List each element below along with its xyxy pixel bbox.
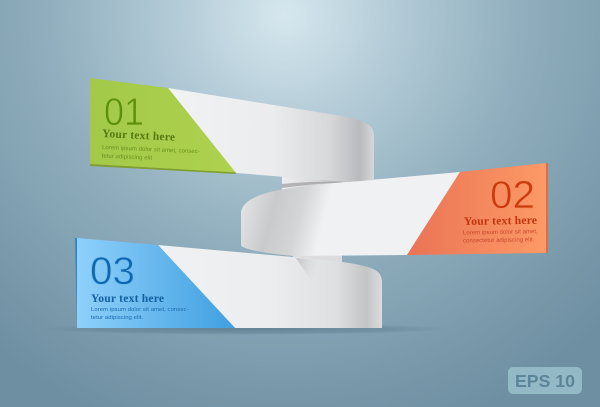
badge: EPS 10: [508, 367, 582, 394]
green tab: [90, 78, 236, 173]
number 02: 02: [490, 174, 535, 217]
ribbon 03 fold shadow: [296, 258, 320, 282]
orange tab: [407, 163, 547, 255]
body text 02: Lorem ipsum dolor sit amet,: [463, 229, 538, 236]
number 03: 03: [90, 250, 135, 293]
floor shadow: [40, 323, 450, 335]
badge: EPS 10: EPS 10: [515, 371, 575, 391]
body text 03: tetur adipiscing elit.: [91, 315, 143, 321]
heading 02: Your text here: [464, 214, 537, 228]
white ribbon 02: [241, 172, 460, 256]
blue tab: [77, 238, 235, 328]
panel: ribbon 02: [241, 163, 548, 256]
body text 01: tetur adipiscing elit: [102, 153, 153, 162]
white ribbon 03: [158, 245, 382, 328]
shadow under ribbon 01: [282, 182, 342, 188]
central column: [282, 172, 342, 266]
panel: ribbon 03: [75, 238, 382, 328]
blue tab side edge: [75, 238, 78, 328]
number 01: 01: [104, 91, 144, 134]
body text 01: Lorem ipsum dolor sit amet, consec-: [102, 145, 200, 155]
white ribbon 01: [168, 88, 374, 182]
green tab lower edge: [90, 164, 236, 174]
panel: ribbon 01: [90, 78, 374, 182]
body text 02: consectetur adipiscing elit.: [463, 237, 535, 244]
orange tab side edge: [546, 163, 548, 253]
heading 01: Your text here: [102, 127, 176, 144]
heading 03: Your text here: [91, 292, 164, 305]
body text 03: Lorem ipsum dolor sit amet, consec-: [91, 307, 189, 313]
